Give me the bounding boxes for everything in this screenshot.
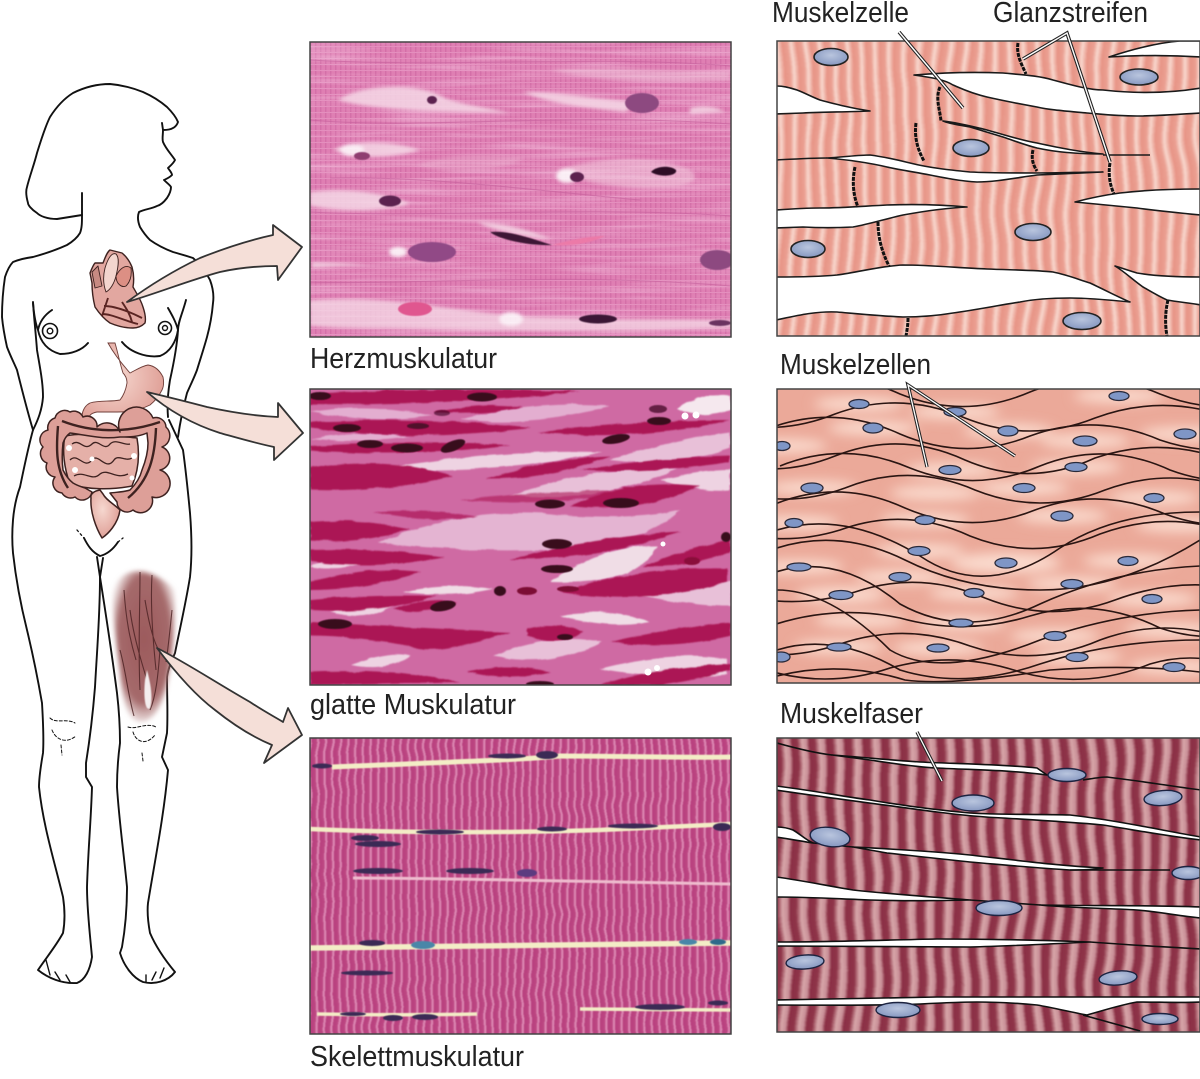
dark streaks — [310, 389, 731, 685]
left flank and outer left leg — [12, 302, 100, 983]
micrograph: smooth muscle — [309, 389, 731, 687]
cell nuclei — [772, 392, 1196, 672]
pale cell centres — [737, 389, 1200, 674]
gaps between fibres — [776, 755, 1200, 1015]
fibre nuclei — [786, 768, 1200, 1024]
knees — [50, 718, 156, 761]
body outline — [2, 84, 213, 983]
cell borders — [778, 390, 1200, 682]
arrow: thigh to skeletal muscle — [157, 648, 302, 763]
leader line: bottom panel — [917, 732, 942, 781]
cell nuclei — [791, 48, 1158, 330]
caption: smooth muscle: glatte Muskulatur — [310, 689, 516, 721]
icon: intestines — [40, 407, 170, 538]
drawing frame — [777, 389, 1200, 683]
intercalated discs — [853, 43, 1168, 336]
white droplets — [644, 412, 700, 676]
drawing frame — [777, 41, 1200, 336]
pale streaks — [310, 395, 731, 677]
groin — [84, 538, 118, 556]
leader lines: top panel — [899, 32, 1110, 162]
caption: cardiac muscle: Herzmuskulatur — [310, 343, 497, 375]
nuclei — [354, 93, 734, 326]
leader lines: middle panel — [908, 385, 1015, 467]
icon: heart — [90, 250, 145, 328]
large intestine — [40, 407, 170, 513]
cell boundaries — [776, 155, 1150, 160]
micrograph: cardiac muscle — [310, 42, 734, 337]
micrograph frame — [310, 389, 731, 685]
drawing: cardiac muscle cells — [778, 42, 1200, 336]
rectum — [91, 490, 120, 538]
micrograph frame — [310, 738, 731, 1034]
icon: stomach — [82, 343, 164, 427]
thigh muscle — [113, 571, 175, 722]
breasts — [33, 300, 186, 356]
right flank — [168, 330, 178, 417]
arrow: heart to cardiac muscle — [127, 225, 302, 302]
arrow: stomach to smooth muscle — [147, 392, 303, 460]
label: Muskelfaser: Muskelfaser — [780, 698, 923, 730]
right leg — [100, 420, 192, 983]
caption: skeletal muscle: Skelettmuskulatur — [310, 1041, 524, 1073]
left shoulder, arm and torso side — [2, 215, 82, 430]
hair and face profile — [26, 84, 213, 437]
nuclei — [309, 392, 731, 687]
label: Muskelzellen: Muskelzellen — [780, 349, 931, 381]
toes — [46, 960, 164, 982]
drawing: smooth muscle cells — [778, 390, 1200, 682]
micrograph frame — [310, 42, 731, 337]
drawing frame — [777, 738, 1200, 1032]
fibre boundaries — [777, 743, 1200, 1031]
gaps between cells — [776, 41, 1200, 320]
small intestine — [64, 434, 138, 489]
micrograph: skeletal muscle — [310, 738, 730, 1034]
drawing: skeletal muscle fibres — [778, 738, 1200, 1032]
